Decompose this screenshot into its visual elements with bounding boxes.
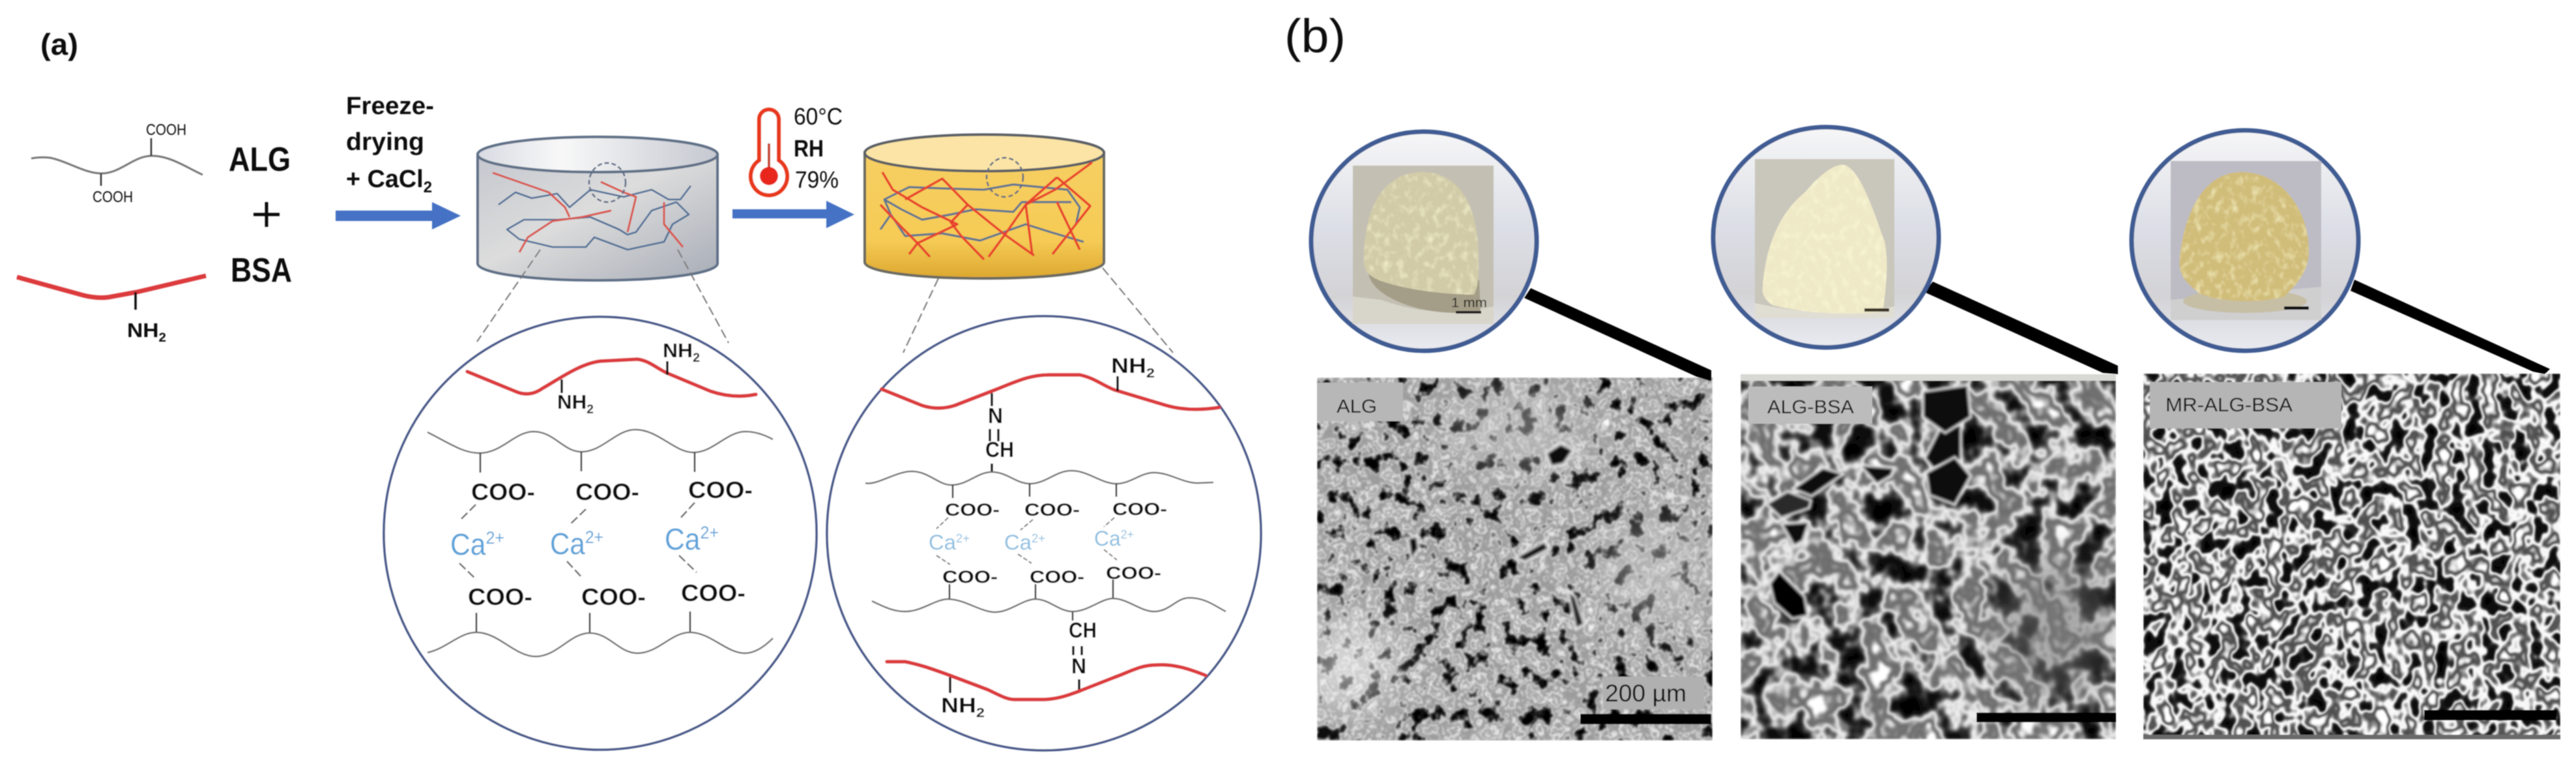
BSA polymer chain: 2 — [159, 331, 166, 345]
zoom circle: ionic crosslinks before treatment — [384, 317, 817, 750]
text: 60°C RH 79%: 60°C — [794, 103, 843, 130]
label: ALG: ALG — [229, 141, 291, 179]
SEM micrograph: ALG — [1303, 377, 1714, 741]
zoom circle: imine crosslinks after treatment: COO- — [1106, 563, 1161, 583]
zoom circle: ionic crosslinks before treatment: NH — [663, 339, 692, 362]
zoom circle: imine crosslinks after treatment: COO- — [945, 500, 1000, 520]
SEM micrograph: ALG-BSA: ALG-BSA — [1767, 397, 1855, 418]
zoom circle: imine crosslinks after treatment: COO- — [1112, 499, 1167, 519]
SEM micrograph: ALG: 200 µm — [1605, 680, 1686, 707]
text: freeze-drying + CaCl2: + CaCl — [346, 166, 424, 193]
label: BSA: BSA — [231, 252, 292, 289]
zoom guide lines — [477, 250, 1173, 353]
ALG polymer chain: COOH — [146, 121, 186, 139]
zoom circle: ionic crosslinks before treatment: 2 — [586, 403, 594, 417]
zoom circle: imine crosslinks after treatment: Ca — [929, 531, 955, 554]
zoom circle: imine crosslinks after treatment: CH — [1069, 618, 1097, 642]
ALG polymer chain: COOH — [93, 188, 133, 206]
heading: (b): (b) — [1284, 10, 1346, 63]
zoom circle: ionic crosslinks before treatment: COO- — [688, 477, 753, 503]
zoom circle: imine crosslinks after treatment: COO- — [1024, 500, 1080, 520]
SEM micrograph: ALG-BSA — [1741, 374, 2116, 739]
panel a: reaction scheme — [17, 27, 1261, 750]
panel b: macroscopic photos and SEM micrographs — [1284, 10, 2560, 741]
SEM micrograph: MR-ALG-BSA: MR-ALG-BSA — [2165, 394, 2293, 416]
connector: ALG-BSA photo to SEM — [1924, 282, 2118, 374]
zoom circle: ionic crosslinks before treatment: COO- — [468, 583, 532, 610]
arrow: Maillard step — [732, 201, 854, 228]
zoom circle: imine crosslinks after treatment: Ca — [1004, 531, 1031, 554]
text: 60°C RH 79%: RH — [794, 135, 824, 162]
zoom circle: imine crosslinks after treatment: 2 — [976, 706, 985, 720]
photo circle: ALG: 1 mm — [1451, 296, 1487, 310]
zoom circle: ionic crosslinks before treatment: 2+ — [700, 523, 719, 542]
BSA polymer chain: NH — [127, 319, 156, 342]
zoom circle: imine crosslinks after treatment: 2 — [1146, 366, 1155, 381]
zoom circle: ionic crosslinks before treatment: 2+ — [585, 527, 603, 547]
zoom circle: imine crosslinks after treatment: Ca — [1094, 527, 1121, 550]
zoom circle: imine crosslinks after treatment: 2+ — [1032, 532, 1045, 545]
text: freeze-drying + CaCl2: 2 — [424, 179, 432, 196]
photo circle: ALG-BSA — [1713, 127, 1939, 347]
text: 60°C RH 79%: 79% — [795, 166, 839, 193]
zoom circle: ionic crosslinks before treatment: COO- — [581, 583, 646, 610]
text: freeze-drying + CaCl2: Freeze- — [346, 93, 434, 120]
zoom circle: ionic crosslinks before treatment: COO- — [681, 580, 745, 606]
zoom circle: imine crosslinks after treatment: CH — [985, 437, 1014, 462]
SEM micrograph: ALG: ALG — [1337, 396, 1377, 417]
cylinder: freeze-dried scaffold — [478, 137, 717, 280]
SEM micrograph: MR-ALG-BSA — [2143, 374, 2560, 739]
zoom circle: ionic crosslinks before treatment: NH — [557, 390, 586, 413]
zoom circle: ionic crosslinks before treatment: Ca — [665, 522, 703, 556]
zoom circle: imine crosslinks after treatment: N — [1071, 654, 1086, 678]
thermometer icon — [751, 110, 787, 195]
connector: MR-ALG-BSA photo to SEM — [2351, 280, 2550, 374]
plus sign — [253, 202, 280, 227]
zoom circle: ionic crosslinks before treatment: 2+ — [485, 528, 504, 548]
zoom circle: imine crosslinks after treatment: 2+ — [956, 532, 970, 545]
zoom circle: imine crosslinks after treatment: COO- — [1030, 567, 1084, 587]
zoom circle: ionic crosslinks before treatment: COO- — [471, 479, 535, 505]
zoom circle: imine crosslinks after treatment: NH — [1111, 354, 1141, 377]
text: freeze-drying + CaCl2 — [346, 93, 434, 196]
photo circle: ALG — [1311, 132, 1537, 351]
zoom circle: imine crosslinks after treatment: NH — [941, 694, 971, 717]
zoom circle: ionic crosslinks before treatment: 2 — [693, 351, 700, 365]
ALG polymer chain — [31, 121, 203, 206]
zoom circle: imine crosslinks after treatment — [827, 316, 1261, 750]
text: freeze-drying + CaCl2: drying — [346, 128, 424, 156]
text: 60°C RH 79% — [794, 103, 843, 193]
zoom circle: imine crosslinks after treatment: 2+ — [1121, 528, 1134, 541]
photo circle: MR-ALG-BSA — [2132, 130, 2358, 351]
zoom circle: ionic crosslinks before treatment: Ca — [450, 527, 489, 561]
heading: (a): (a) — [40, 27, 78, 61]
cylinder: Maillard crosslinked scaffold — [865, 134, 1104, 278]
zoom circle: ionic crosslinks before treatment: Ca — [550, 527, 588, 561]
zoom circle: imine crosslinks after treatment: COO- — [942, 567, 998, 587]
zoom circle: ionic crosslinks before treatment: COO- — [575, 479, 639, 505]
connector: ALG photo to SEM — [1524, 288, 1711, 381]
arrow: freeze-drying step — [336, 202, 461, 229]
zoom circle: imine crosslinks after treatment: N — [988, 404, 1003, 428]
BSA polymer chain — [17, 276, 206, 345]
